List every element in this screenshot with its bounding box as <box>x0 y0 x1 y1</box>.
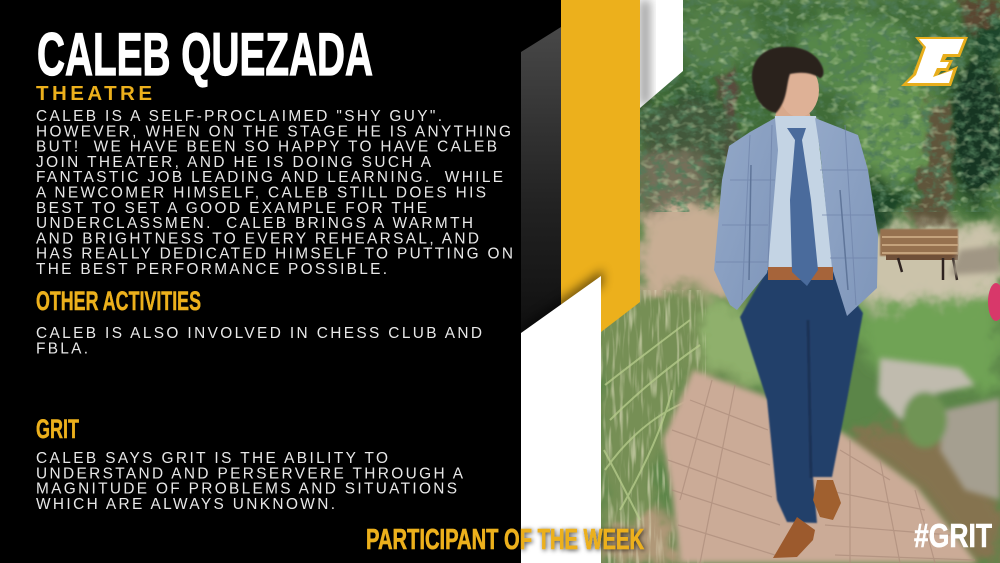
text block: grit: UNDERSTAND AND PERSERVERE THROUGH A <box>36 465 464 482</box>
ribbon: white top-right band <box>640 0 683 108</box>
text block: biography: FANTASTIC JOB LEADING AND LEARNING. WHILE <box>36 169 503 186</box>
text block: biography: AND BRIGHTNESS TO EVERY REHEARSAL, AND <box>36 230 479 247</box>
photo: grass blades <box>604 320 700 520</box>
photo: grass texture <box>601 290 706 563</box>
text block: biography: CALEB IS A SELF-PROCLAIMED "SHY GUY". <box>36 108 442 125</box>
figure: curly hair <box>752 47 823 113</box>
figure: trousers <box>740 268 863 523</box>
text block: biography <box>36 108 513 278</box>
photo: student on garden path <box>600 0 1000 563</box>
figure: shoes <box>773 480 841 558</box>
ribbon: dark grey band <box>521 27 561 350</box>
logo: school letter E <box>901 37 968 86</box>
text block: biography: UNDERCLASSMEN. CALEB BRINGS A WARMTH <box>36 215 473 232</box>
text block: biography: HOWEVER, WHEN ON THE STAGE HE IS ANYTHING <box>36 123 511 140</box>
photo: garden background <box>600 0 1000 563</box>
heading: grit: GRIT <box>36 414 79 444</box>
figure: shirt <box>767 116 833 270</box>
figure: belt <box>768 267 833 280</box>
text block: biography: A NEWCOMER HIMSELF, CALEB STILL DOES HIS <box>36 184 486 202</box>
text block: grit: WHICH ARE ALWAYS UNKNOWN. <box>36 496 335 513</box>
title: student name: CALEB QUEZADA <box>37 21 373 88</box>
photo: student figure <box>714 47 878 558</box>
figure: plaid blazer <box>714 118 878 316</box>
subtitle: theatre: THEATRE <box>36 82 152 105</box>
text block: other activities: CALEB IS ALSO INVOLVED IN CHESS CLUB AND <box>36 325 482 342</box>
text block: grit <box>36 450 464 513</box>
photo: foliage texture <box>640 0 1000 212</box>
text block: biography: BUT! WE HAVE BEEN SO HAPPY TO HAVE CALEB <box>36 139 497 156</box>
ribbon shadow <box>640 0 650 105</box>
photo: pink flower <box>988 283 1000 321</box>
text block: biography: JOIN THEATER, AND HE IS DOING SUCH A <box>36 154 432 171</box>
figure: neck and head <box>752 47 823 122</box>
text block: biography: THE BEST PERFORMANCE POSSIBLE. <box>36 261 387 278</box>
text block: other activities <box>36 325 482 357</box>
ribbon: white bottom band <box>521 269 603 563</box>
ribbon: gold band <box>561 0 640 332</box>
text block: grit: CALEB SAYS GRIT IS THE ABILITY TO <box>36 450 388 467</box>
heading: other activities: OTHER ACTIVITIES <box>36 286 201 316</box>
text block: grit: MAGNITUDE OF PROBLEMS AND SITUATIONS <box>36 481 457 498</box>
figure: tie <box>787 128 818 286</box>
photo: park bench <box>880 229 958 280</box>
photo: brick path <box>663 370 977 563</box>
text block: biography: HAS REALLY DEDICATED HIMSELF TO PUTTING ON <box>36 246 513 263</box>
text block: other activities: FBLA. <box>36 340 88 357</box>
photo: rocks and plants <box>878 245 1000 500</box>
text block: biography: BEST TO SET A GOOD EXAMPLE FOR THE <box>36 200 427 217</box>
caption: participant of the week: PARTICIPANT OF THE WEEK <box>366 524 644 556</box>
